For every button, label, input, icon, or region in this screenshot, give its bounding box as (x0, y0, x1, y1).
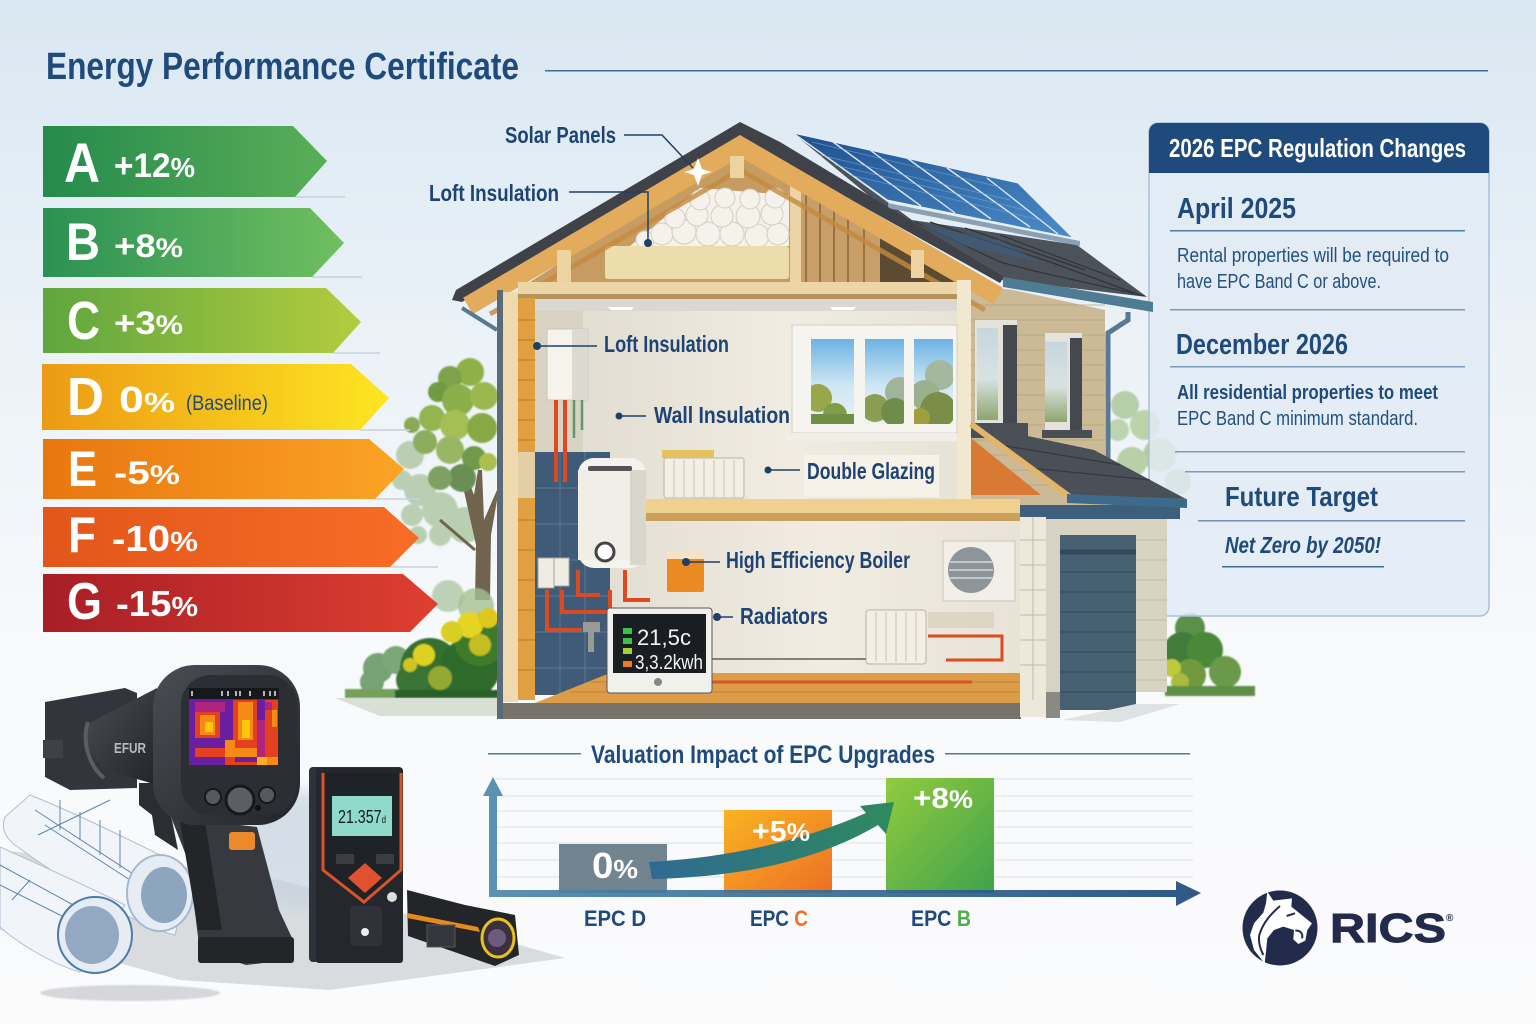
bar value labels: 0% (592, 845, 638, 886)
gutter (1003, 277, 1153, 312)
RICS logo: ® (1446, 913, 1454, 924)
side roof (793, 133, 1147, 297)
main rafters (468, 146, 998, 314)
April 2025 rule: April 2025 (1177, 193, 1296, 225)
right timber column (957, 280, 971, 507)
label: high efficiency boiler (682, 547, 910, 573)
label: double glazing: Double Glazing (807, 458, 935, 484)
camera handle (171, 817, 293, 965)
band E -5% (43, 439, 404, 499)
lower room wall (535, 520, 1020, 680)
April 2025 rule: Rental properties will be required to (1177, 244, 1449, 267)
December 2026 rule (1170, 329, 1465, 430)
chart title: Valuation Impact of EPC Upgrades (591, 741, 935, 769)
pale low foliage (392, 441, 483, 546)
bush left of house (335, 580, 506, 716)
rafter posts (557, 156, 924, 282)
camera controls (205, 786, 275, 814)
category labels: EPC C (750, 906, 808, 931)
table shadow (0, 850, 565, 990)
regulation panel (1149, 123, 1489, 616)
ground floor timber (535, 673, 1020, 703)
crown foliage (404, 358, 498, 492)
band D 0% Baseline: 0% (119, 379, 175, 420)
side windows (970, 320, 1092, 438)
EPC rating ladder (42, 126, 438, 632)
thermal camera (43, 665, 300, 965)
bar EPC D (559, 844, 667, 893)
panel header (1149, 123, 1489, 173)
April 2025 rule: have EPC Band C or above. (1177, 270, 1381, 293)
house base (497, 290, 1021, 719)
double glazing label background (804, 455, 939, 497)
growth arrow (649, 802, 894, 879)
label: loft insulation outer: Loft Insulation (429, 180, 559, 206)
label: radiators: Radiators (740, 603, 828, 629)
upper radiator (662, 450, 744, 498)
band G -15%: -15% (116, 583, 198, 624)
smart meter display (607, 608, 712, 693)
band B +8%: B (66, 213, 100, 272)
wall boiler unit (547, 329, 588, 400)
camera head (153, 665, 300, 825)
bar EPC B (886, 778, 994, 893)
orange control box (667, 551, 704, 592)
mid floor (646, 499, 1020, 521)
band G -15% (43, 573, 438, 632)
air source heat pump (943, 541, 1015, 601)
label: solar panels (505, 122, 693, 168)
central window (786, 325, 957, 441)
label: loft insulation inner: Loft Insulation (604, 331, 729, 357)
upper room wall (535, 299, 957, 500)
bar value labels: +8% (913, 783, 973, 815)
tree and bush right of house (1107, 391, 1255, 696)
tree left of house (392, 358, 498, 600)
label: loft insulation outer (429, 180, 652, 247)
label: wall insulation: Wall Insulation (654, 402, 790, 428)
band F -10% (43, 507, 419, 567)
band E -5%: E (68, 441, 97, 497)
smart meter display: 21,5c (637, 625, 691, 650)
band F -10%: -10% (112, 518, 198, 559)
laser measure body (407, 890, 519, 966)
band C +3%: C (67, 291, 100, 351)
RICS logo: RICS (1330, 905, 1446, 951)
panel body (1149, 123, 1489, 616)
ceiling lights (608, 307, 856, 310)
band E -5%: -5 % (114, 455, 180, 491)
hot water cylinder (578, 458, 646, 568)
category labels: EPC D (584, 906, 646, 931)
label: high efficiency boiler: High Efficiency Boiler (726, 547, 910, 573)
December 2026 rule: December 2026 (1176, 329, 1348, 361)
trigger button (229, 832, 255, 850)
lower pipes (547, 570, 650, 630)
band D 0% Baseline: D (67, 367, 104, 427)
band C +3% (43, 288, 361, 353)
trunk (458, 465, 497, 600)
garage roof (971, 424, 1187, 508)
bar value labels (592, 783, 973, 886)
category labels: EPC B (911, 906, 971, 931)
camera bracket (139, 783, 178, 850)
band A +12%: A (64, 131, 100, 194)
bush ground shadow (335, 698, 498, 716)
band F -10%: F (68, 507, 96, 563)
label: wall insulation (616, 402, 790, 428)
inspection tools (0, 665, 565, 1001)
smart meter display: 3,3.2kwh (635, 652, 703, 674)
bar EPC C (724, 810, 832, 893)
attic planks (790, 172, 956, 282)
thermal screen (189, 688, 279, 765)
star sparkle (684, 158, 712, 186)
category labels (584, 906, 971, 931)
garage (1020, 505, 1180, 722)
future target: Future Target (1225, 481, 1378, 512)
label: radiators (713, 603, 828, 629)
band G -15%: G (67, 573, 102, 631)
camera lens block (45, 688, 137, 790)
downpipe right (1108, 312, 1128, 480)
handheld meter: 21.357d (338, 807, 386, 827)
band A +12% (43, 126, 327, 197)
lower radiator (866, 610, 1002, 664)
April 2025 rule (1170, 193, 1465, 293)
attic beam (518, 282, 958, 299)
loft batt (605, 246, 789, 279)
label: loft insulation inner (533, 331, 729, 357)
thermal camera: EFUR (114, 740, 146, 757)
bar value labels: +5% (752, 816, 810, 848)
title: Energy Performance Certificate (46, 46, 519, 88)
valuation chart (483, 741, 1201, 931)
axes (483, 777, 1201, 906)
left gutter pipe (462, 308, 497, 330)
RICS logo (1242, 890, 1454, 966)
left wall timber and brick (503, 292, 535, 702)
future target: Net Zero by 2050! (1225, 532, 1381, 558)
December 2026 rule: All residential properties to meet (1177, 382, 1438, 404)
rolled blueprints (0, 795, 193, 973)
attic interior (530, 148, 956, 282)
December 2026 rule: EPC Band C minimum standard. (1177, 407, 1418, 430)
blue tiled wall (535, 452, 610, 695)
band C +3%: +3% (114, 305, 183, 341)
solar panels (793, 133, 1080, 246)
label: double glazing (764, 458, 935, 484)
boiler pipes (556, 400, 565, 482)
handheld meter (309, 767, 403, 963)
label: solar panels: Solar Panels (505, 122, 616, 148)
junction boxes (538, 558, 569, 588)
future target (1198, 481, 1465, 568)
house cutaway (452, 122, 1187, 722)
panel header: 2026 EPC Regulation Changes (1169, 133, 1466, 163)
band B +8%: +8% (114, 228, 183, 264)
side wall exterior (960, 284, 1105, 510)
band B +8% (43, 208, 344, 277)
band D 0% Baseline (42, 364, 389, 430)
band D 0% Baseline: (Baseline) (186, 392, 268, 415)
loft insulation clouds (630, 188, 789, 249)
dark ridge shingles (452, 122, 1004, 302)
band A +12%: +12% (114, 147, 195, 185)
